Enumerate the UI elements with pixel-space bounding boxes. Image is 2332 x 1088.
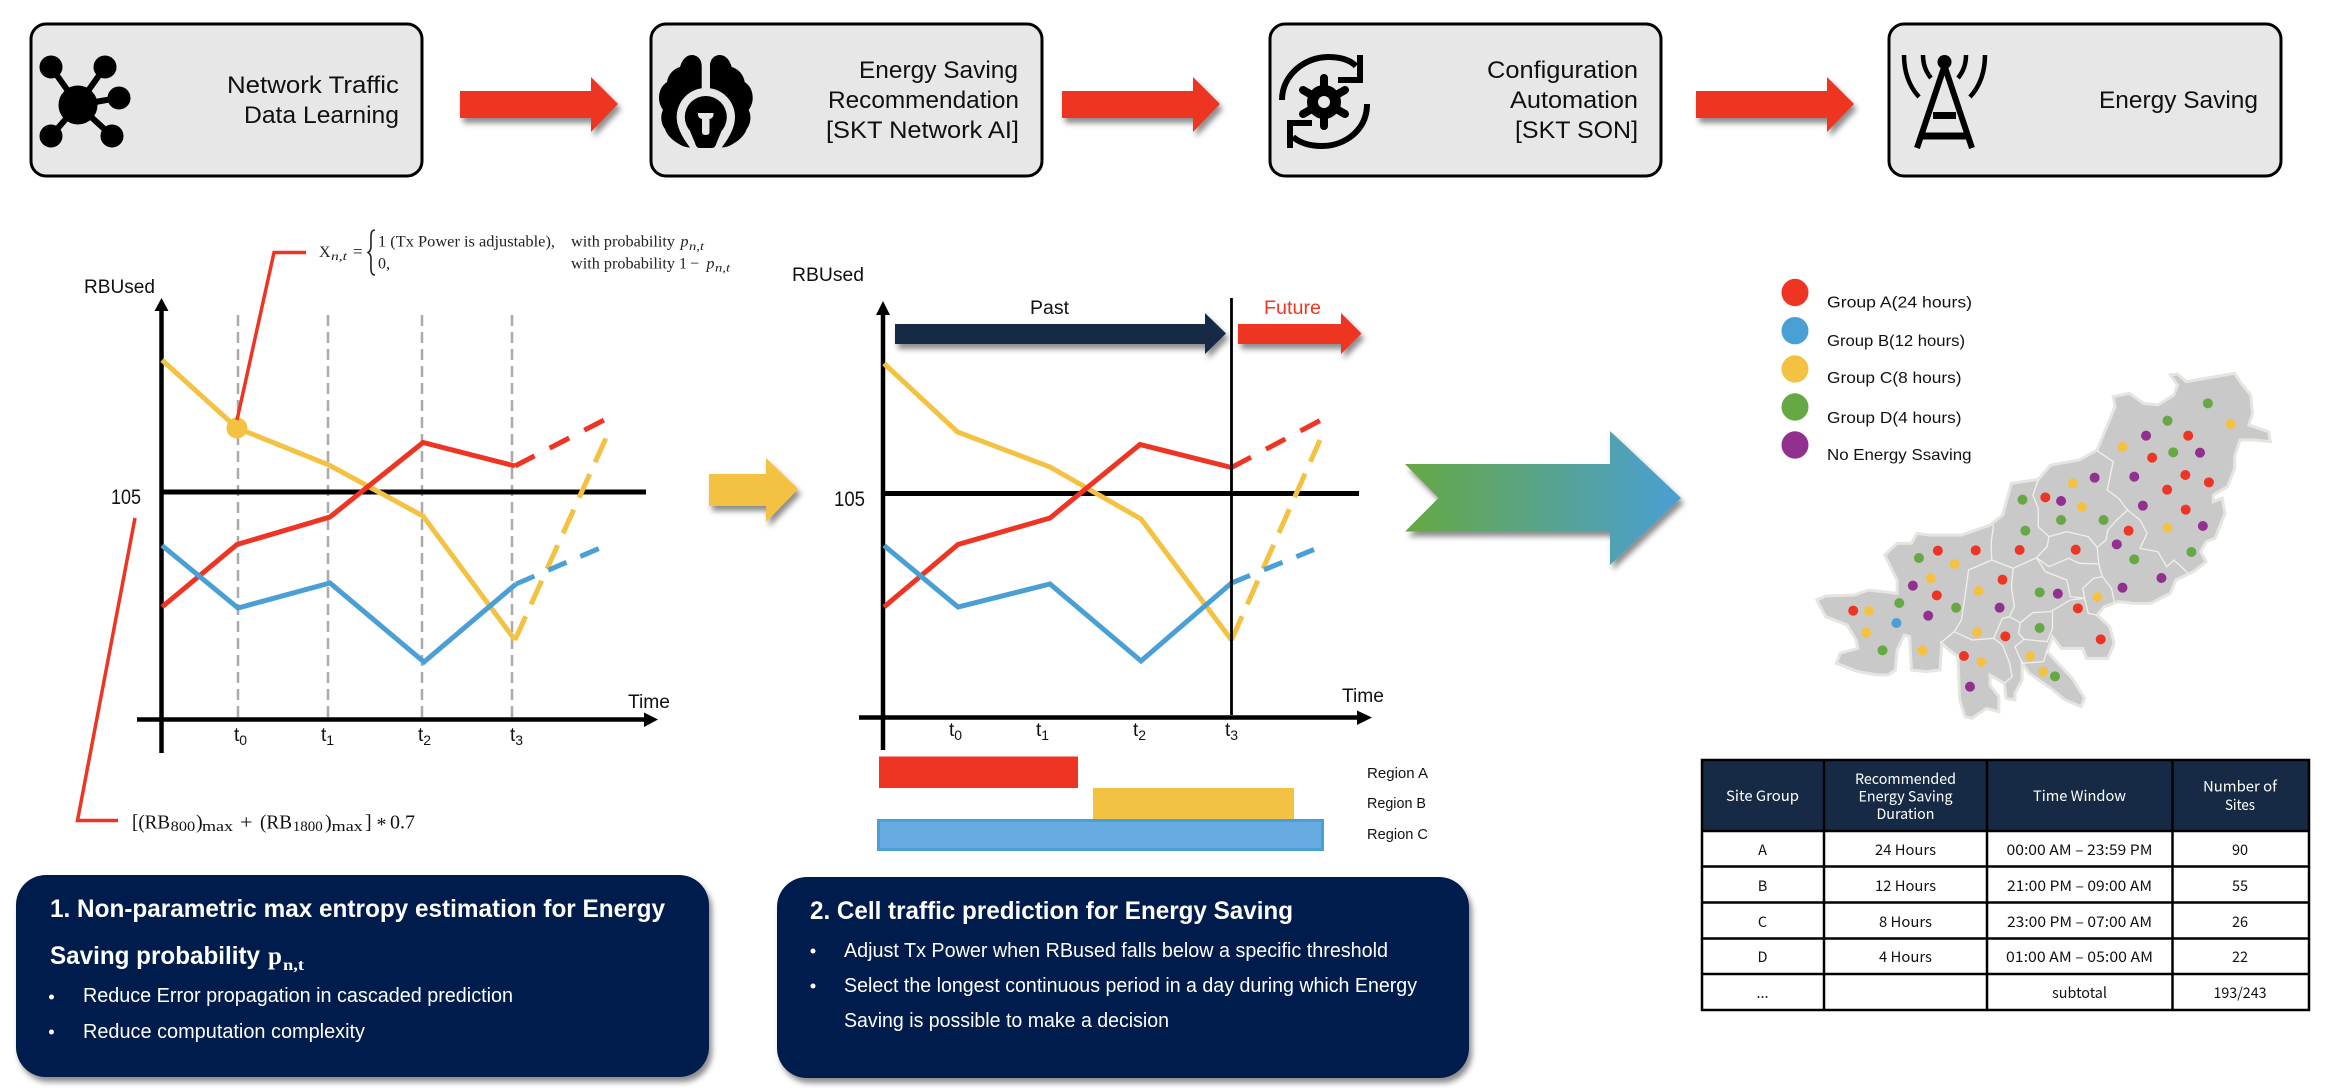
- axis labels: t: [234, 725, 239, 746]
- equation: X n,t: p: [680, 234, 688, 251]
- map legend: Group B(12 hours): [1827, 333, 1965, 350]
- map legend: No Energy Ssaving: [1827, 447, 1972, 464]
- label: [SKT Network AI]: [826, 117, 1019, 144]
- region bar A: [879, 756, 1078, 788]
- axes and threshold: [859, 301, 1372, 750]
- formula: threshold: ): [325, 812, 332, 834]
- table rows: ...: [1756, 982, 1769, 1003]
- header text: Energy Saving: [1858, 786, 1952, 806]
- map legend: Group D(4 hours): [1827, 410, 1962, 427]
- panel: max entropy estimation: [16, 875, 709, 1077]
- panel heading: p: [268, 943, 282, 970]
- chart: cell traffic prediction: [792, 265, 1428, 850]
- chart: RBUsed probability estimation: [78, 230, 731, 836]
- callout line to threshold formula: [78, 518, 135, 820]
- header text: Site Group: [1726, 785, 1799, 806]
- arrow: past: [895, 313, 1226, 354]
- equation: X n,t: n,t: [331, 251, 348, 263]
- axis labels: Time: [1342, 686, 1384, 707]
- axis labels: t: [1225, 720, 1230, 741]
- step: Energy Saving Recommendation: [651, 24, 1042, 176]
- icon: network nodes: [40, 56, 130, 147]
- equation: X n,t: X: [319, 244, 331, 261]
- axis labels: RBUsed: [84, 277, 155, 298]
- equation: X n,t: 1: [679, 255, 687, 272]
- axis labels: [84, 277, 670, 748]
- formula: threshold: ]: [365, 812, 372, 834]
- axis labels: 1: [326, 732, 334, 748]
- table rows: 90: [2232, 839, 2248, 860]
- table rows: 01:00 AM – 05:00 AM: [2006, 946, 2153, 967]
- axes and threshold: [137, 298, 658, 753]
- table rows: B: [1758, 875, 1767, 896]
- formula: threshold: max: [202, 819, 234, 835]
- header text: [1726, 768, 2278, 824]
- axis labels: 0: [239, 732, 247, 748]
- region labels: Region B: [1367, 795, 1426, 812]
- equation: X n,t: 0,: [378, 255, 390, 272]
- axis labels: 105: [111, 486, 141, 509]
- step: Network Traffic Data Learning: [31, 24, 422, 176]
- label: Energy Saving: [2099, 87, 2258, 114]
- region labels: Region A: [1367, 765, 1428, 782]
- yellow series: [162, 360, 606, 640]
- map landmass: [1817, 373, 2270, 718]
- panel heading: 2. Cell traffic prediction for Energy Saving: [810, 897, 1293, 925]
- label: [826, 57, 1019, 144]
- panel bullets: Reduce Error propagation in cascaded prediction: [83, 985, 513, 1007]
- axis labels: Past: [1030, 298, 1070, 319]
- table rows: 00:00 AM – 23:59 PM: [2006, 839, 2152, 860]
- blue site: [1891, 618, 1901, 628]
- green sites: [1877, 398, 2213, 681]
- axis labels: t: [1036, 720, 1041, 741]
- step: Configuration Automation: [1270, 24, 1661, 176]
- red sites: [1848, 431, 2214, 661]
- formula: threshold: 0.7: [390, 812, 415, 834]
- table rows: [1756, 839, 2266, 1003]
- formula: threshold: *: [376, 814, 386, 836]
- table rows: 193/243: [2214, 982, 2266, 1003]
- table: site groups: [1702, 760, 2309, 1010]
- table rows: 8 Hours: [1879, 911, 1932, 932]
- axis labels: [792, 265, 1384, 743]
- dashed time gridlines: [238, 315, 512, 719]
- equation: X n,t: with probability: [571, 255, 675, 272]
- present-time divider: [1230, 298, 1233, 715]
- label: Recommendation: [828, 87, 1019, 114]
- label: [227, 72, 399, 129]
- icon: rotating gear: [1282, 55, 1367, 148]
- table rows: A: [1758, 839, 1767, 860]
- step: Energy Saving: [1889, 24, 2281, 176]
- panel heading: n,t: [283, 957, 305, 974]
- table rows: 23:00 PM – 07:00 AM: [2007, 911, 2152, 932]
- panel bullets: Select the longest continuous period in a day during which Energy: [844, 975, 1417, 997]
- table rows: 24 Hours: [1875, 839, 1936, 860]
- table rows: 4 Hours: [1879, 946, 1932, 967]
- axis labels: 2: [1138, 727, 1146, 743]
- formula: threshold: 1800: [293, 819, 323, 835]
- map legend: Group C(8 hours): [1827, 370, 1962, 387]
- axis labels: 3: [515, 732, 523, 748]
- axis labels: t: [418, 725, 423, 746]
- map: site groups by district: [1817, 373, 2270, 718]
- panel heading: [50, 895, 665, 974]
- panel heading: 1. Non-parametric max entropy estimation for Energy: [50, 895, 665, 923]
- label: Automation: [1510, 87, 1638, 114]
- label: [1487, 57, 1638, 144]
- axis labels: Future: [1264, 298, 1321, 319]
- axis labels: 0: [954, 727, 962, 743]
- equation: X n,t: =: [353, 242, 363, 261]
- table rows: 21:00 PM – 09:00 AM: [2007, 875, 2152, 896]
- yellow sites: [1861, 419, 2236, 677]
- formula: threshold: [132, 812, 415, 836]
- axis labels: 1: [1041, 727, 1049, 743]
- formula: threshold: 800: [171, 819, 195, 835]
- axis labels: t: [321, 725, 326, 746]
- arrow: step 1 to 2: [460, 77, 618, 132]
- panel bullets: [810, 940, 1417, 1032]
- header text: Number of: [2203, 776, 2278, 796]
- table rows: D: [1758, 946, 1768, 967]
- panel heading: Saving probability: [50, 942, 260, 970]
- blue series: [162, 546, 600, 662]
- axis labels: 3: [1230, 727, 1238, 743]
- map legend: Group A(24 hours): [1827, 294, 1972, 312]
- header text: Sites: [2225, 794, 2255, 815]
- arrow: step 3 to 4: [1696, 77, 1854, 132]
- table rows: 55: [2232, 875, 2248, 896]
- equation: X n,t: [319, 230, 731, 275]
- axis labels: 105: [834, 488, 865, 511]
- highlighted point: [226, 418, 248, 438]
- arrow: yellow between charts: [709, 458, 798, 522]
- callout line to equation: [237, 252, 306, 420]
- equation: X n,t: n,t: [689, 241, 705, 253]
- axis labels: t: [510, 725, 515, 746]
- header text: Duration: [1876, 803, 1934, 824]
- region bar B: [1093, 788, 1294, 820]
- yellow series: [884, 364, 1320, 640]
- table rows: 22: [2232, 946, 2248, 967]
- axis labels: 2: [423, 732, 431, 748]
- equation: X n,t: n,t: [715, 262, 731, 274]
- axis labels: t: [1133, 720, 1138, 741]
- header text: Time Window: [2033, 785, 2126, 806]
- panel bullets: Adjust Tx Power when RBused falls below a specific threshold: [844, 940, 1388, 962]
- region labels: Region C: [1367, 826, 1428, 843]
- formula: threshold: max: [332, 819, 363, 835]
- table header background: [1702, 760, 2309, 831]
- label: [SKT SON]: [1515, 117, 1638, 144]
- header text: Recommended: [1855, 768, 1956, 789]
- red series: [162, 419, 606, 607]
- table grid: [1702, 760, 2309, 1010]
- purple sites: [1908, 431, 2208, 692]
- blue series: [884, 546, 1314, 661]
- formula: threshold: ): [196, 812, 203, 834]
- icon: cell tower: [1904, 55, 1985, 148]
- red series: [884, 420, 1321, 607]
- icon: brain with keyhole: [659, 55, 753, 148]
- label: Configuration: [1487, 57, 1638, 84]
- axis labels: RBUsed: [792, 265, 864, 286]
- formula: threshold: +: [240, 812, 252, 834]
- table rows: 12 Hours: [1875, 875, 1936, 896]
- axis labels: t: [949, 720, 954, 741]
- region bar C: [878, 820, 1322, 850]
- equation: X n,t: −: [690, 255, 699, 272]
- table rows: subtotal: [2052, 982, 2107, 1003]
- equation: X n,t: p: [706, 255, 714, 272]
- panel: cell traffic prediction: [777, 877, 1469, 1078]
- panel bullets: Reduce computation complexity: [83, 1021, 365, 1043]
- map legend: [1782, 279, 1972, 464]
- label: Data Learning: [244, 102, 399, 129]
- district boundaries: [1940, 451, 2188, 683]
- label: Energy Saving: [859, 57, 1018, 84]
- arrow: future: [1238, 313, 1362, 354]
- table rows: 26: [2232, 911, 2248, 932]
- table rows: C: [1758, 911, 1767, 932]
- equation: X n,t: with probability: [571, 234, 675, 251]
- panel bullets: [49, 985, 513, 1043]
- arrow: gradient to map: [1405, 431, 1681, 565]
- axis labels: Time: [628, 692, 670, 713]
- panel bullets: Saving is possible to make a decision: [844, 1010, 1169, 1032]
- region labels: [1367, 765, 1428, 843]
- arrow: step 2 to 3: [1062, 77, 1220, 132]
- formula: threshold: (RB: [260, 812, 292, 834]
- label: Network Traffic: [227, 72, 399, 99]
- formula: threshold: [(RB: [132, 812, 170, 834]
- equation: X n,t: 1 (Tx Power is adjustable),: [378, 234, 555, 251]
